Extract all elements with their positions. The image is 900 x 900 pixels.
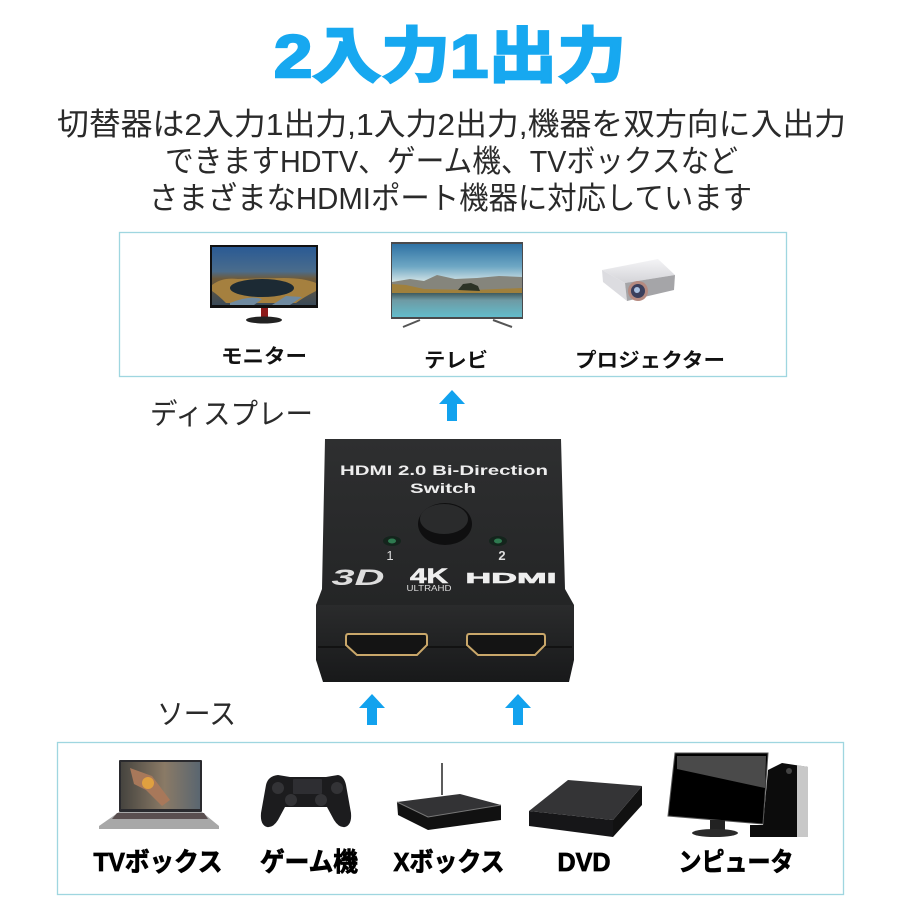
icon: projector bbox=[602, 259, 675, 301]
arrow: source to port 1 bbox=[359, 694, 385, 725]
description text: できますHDTV、ゲーム機、TVボックスなど bbox=[165, 144, 738, 179]
LED indicators: 1 bbox=[386, 548, 394, 563]
logo: 4K Ultra HD bbox=[406, 565, 452, 593]
label: computer: ンピュータ bbox=[678, 847, 794, 877]
logo: 3D: 3D bbox=[332, 565, 385, 590]
arrow: source to port 2 bbox=[505, 694, 531, 725]
icon: laptop bbox=[99, 760, 219, 829]
logo: 4K Ultra HD: ULTRAHD bbox=[406, 583, 452, 593]
label: DVD: DVD bbox=[558, 847, 610, 877]
port 2 bbox=[467, 634, 545, 655]
icon: X box media player bbox=[397, 763, 501, 830]
logo: HDMI: HDMI bbox=[466, 570, 556, 587]
description text bbox=[57, 107, 846, 216]
label: TV box: TVボックス bbox=[94, 847, 222, 877]
panel: sources bbox=[58, 742, 844, 894]
label: X box: Xボックス bbox=[394, 847, 504, 877]
push button bbox=[418, 503, 472, 545]
heading: display: ディスプレー bbox=[150, 398, 313, 431]
switch top label: HDMI 2.0 Bi-Direction bbox=[340, 462, 548, 478]
label: projector: プロジェクター bbox=[575, 349, 725, 372]
description text: 切替器は2入力1出力,1入力2出力,機器を双方向に入出力 bbox=[57, 107, 846, 142]
label: monitor: モニター bbox=[221, 345, 307, 368]
label: television: テレビ bbox=[424, 349, 488, 372]
arrow: up to display bbox=[439, 390, 465, 421]
LED indicators bbox=[383, 536, 507, 563]
title: 2入力1出力 bbox=[274, 23, 626, 90]
icon: HDMI switch bbox=[316, 439, 574, 682]
description text: さまざまなHDMIポート機器に対応しています bbox=[149, 181, 752, 216]
logo: 4K Ultra HD: 4K bbox=[410, 565, 448, 588]
switch top label second line: Switch bbox=[410, 480, 476, 496]
icon: television bbox=[391, 242, 523, 327]
icon: desktop computer bbox=[668, 753, 808, 837]
icon: game controller bbox=[261, 775, 351, 827]
icon: DVD player bbox=[529, 780, 642, 837]
heading: source: ソース bbox=[157, 699, 236, 731]
label: game console: ゲーム機 bbox=[260, 847, 358, 877]
panel: displays bbox=[120, 232, 786, 376]
LED indicators: 2 bbox=[498, 548, 506, 563]
port 1 bbox=[346, 634, 427, 655]
icon: monitor bbox=[210, 245, 318, 324]
